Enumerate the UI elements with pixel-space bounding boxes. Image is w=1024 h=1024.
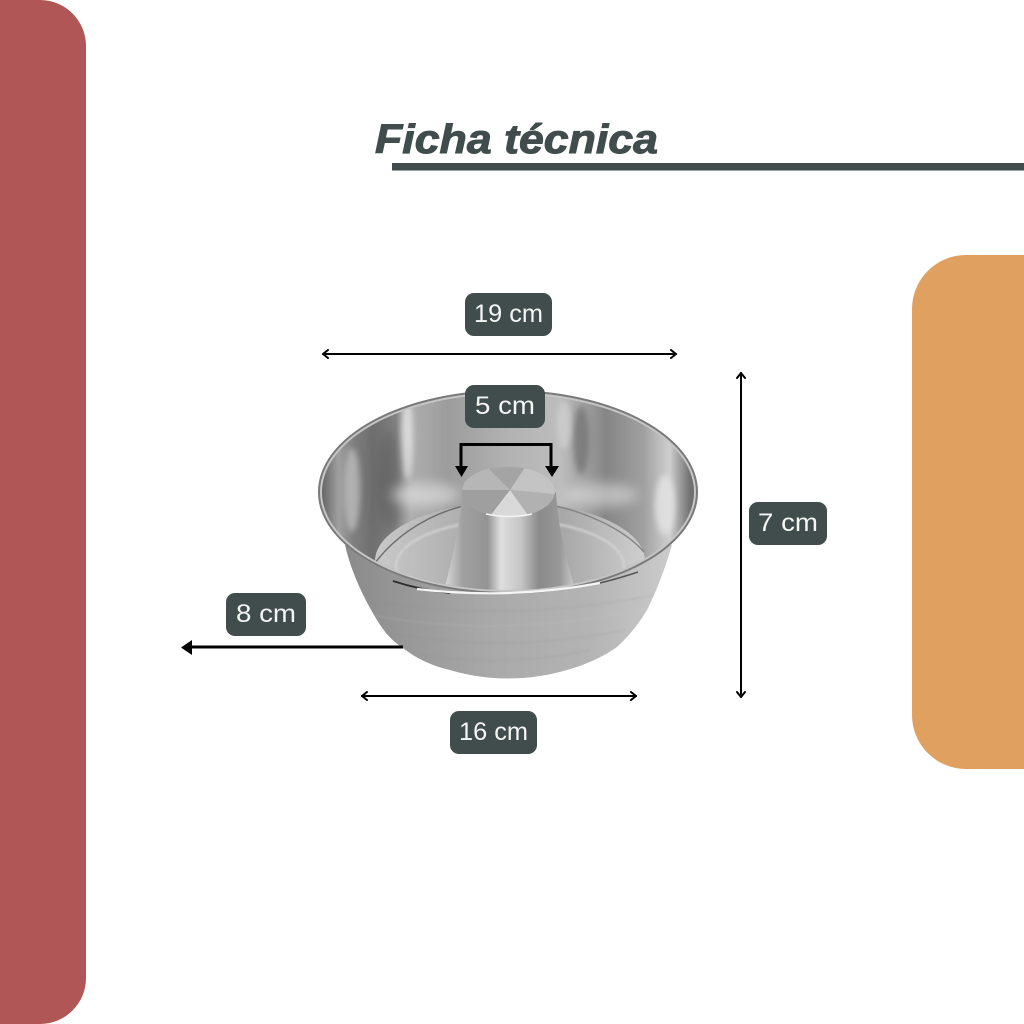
label: 7 cm: 7 cm <box>758 509 818 537</box>
rim highlight <box>393 581 450 593</box>
tube top <box>500 492 541 504</box>
dimension arrow: 8 cm <box>181 640 403 655</box>
label: 19 cm: 19 cm <box>474 300 543 328</box>
pan floor <box>375 506 645 584</box>
title underline <box>392 163 1024 170</box>
product photo: ring cake pan <box>318 390 698 678</box>
label: 8 cm <box>226 593 306 636</box>
pan rim <box>318 390 698 594</box>
centre tube <box>444 492 576 592</box>
panel: orange side block <box>912 255 1024 769</box>
title: Ficha técnica <box>375 116 658 162</box>
pan outer wall <box>345 545 672 678</box>
pan interior <box>322 396 694 590</box>
wall brushing streaks <box>365 595 655 660</box>
label: 19 cm <box>465 293 552 336</box>
label: 7 cm <box>749 502 827 545</box>
interior highlights <box>401 396 413 480</box>
label: 5 cm <box>465 385 545 428</box>
dimension arrow: 19 cm width <box>323 350 676 358</box>
dimension arrow: 16 cm base <box>362 692 636 700</box>
dimension arrow: 7 cm height <box>737 373 745 697</box>
label: 16 cm <box>450 711 537 754</box>
label: 16 cm: 16 cm <box>459 718 528 746</box>
label: 5 cm: 5 cm <box>475 392 535 420</box>
panel: red side bar <box>0 0 86 1024</box>
label: 8 cm: 8 cm <box>236 600 296 628</box>
dimension arrow: 5 cm tube bracket <box>455 444 559 477</box>
